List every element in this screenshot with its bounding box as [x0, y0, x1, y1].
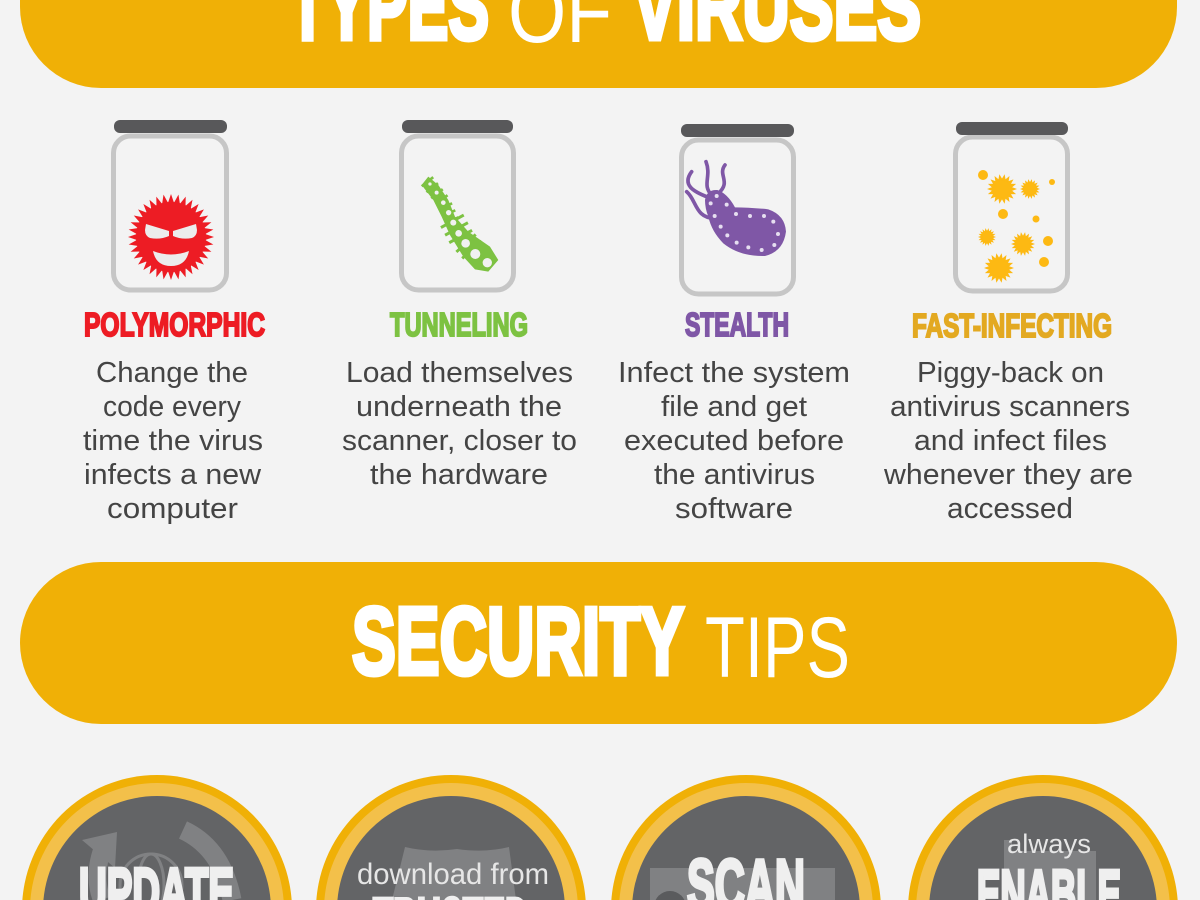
- text: tunneling description: underneath the: [356, 391, 562, 423]
- icon: green worm virus: [422, 177, 498, 272]
- badge: always enable: [908, 775, 1178, 900]
- label: tunneling: TUNNELING: [390, 306, 528, 343]
- jar: stealth: [681, 124, 794, 294]
- text: tunneling description: [342, 357, 577, 491]
- text: download from: download from: [357, 858, 549, 891]
- text: fast-infecting description: whenever they are: [883, 459, 1133, 491]
- icon: red spiky virus: [128, 194, 214, 280]
- text: fast-infecting description: accessed: [947, 493, 1073, 525]
- icon: update arrows and globe: [82, 830, 232, 900]
- text: stealth description: file and get: [661, 391, 807, 423]
- text: stealth description: Infect the system: [618, 357, 850, 389]
- text: fast-infecting description: [883, 357, 1133, 525]
- text: polymorphic description: code every: [103, 391, 241, 423]
- text: stealth description: executed before: [624, 425, 844, 457]
- text: fast-infecting description: Piggy-back on: [917, 357, 1104, 389]
- label: fast-infecting: FAST-INFECTING: [912, 307, 1112, 344]
- badge: scan: [611, 775, 881, 900]
- banner: security tips: [20, 562, 1177, 724]
- text: polymorphic description: time the virus: [83, 425, 263, 457]
- panel: fast-infecting: [883, 122, 1133, 525]
- icon: shield: [392, 847, 516, 900]
- text: polymorphic description: Change the: [96, 357, 248, 389]
- text: polymorphic description: infects a new: [84, 459, 262, 491]
- panel: polymorphic: [83, 120, 265, 525]
- text: tunneling description: the hardware: [370, 459, 548, 491]
- panel: stealth: [618, 124, 850, 525]
- icon: firewall: [1004, 840, 1096, 900]
- icon: purple bacterium: [687, 162, 786, 256]
- icon: scanner: [650, 868, 835, 900]
- jar: fast-infecting: [956, 122, 1068, 291]
- text: fast-infecting description: antivirus scanners: [890, 391, 1130, 423]
- text: polymorphic description: [83, 357, 263, 525]
- title: types of viruses: [289, 0, 921, 61]
- panel: tunneling: [342, 120, 577, 491]
- title: security tips: SECURITY: [352, 588, 684, 695]
- text: tunneling description: Load themselves: [346, 357, 573, 389]
- title: security tips: TIPS: [705, 600, 850, 696]
- text: stealth description: [618, 357, 850, 525]
- banner: types of viruses: [20, 0, 1177, 88]
- jar: tunneling: [402, 120, 514, 290]
- text: stealth description: the antivirus: [654, 459, 815, 491]
- jar: polymorphic: [114, 120, 227, 290]
- label: stealth: STEALTH: [685, 306, 789, 343]
- text: stealth description: software: [675, 493, 793, 525]
- badge: update: [22, 775, 292, 900]
- text: tunneling description: scanner, closer to: [342, 425, 577, 457]
- badge: download from trusted: [316, 775, 586, 900]
- text: always: always: [1007, 829, 1091, 859]
- label: polymorphic: POLYMORPHIC: [84, 306, 265, 343]
- text: fast-infecting description: and infect files: [914, 425, 1107, 457]
- text: polymorphic description: computer: [107, 493, 238, 525]
- icon: yellow spores: [978, 170, 1055, 283]
